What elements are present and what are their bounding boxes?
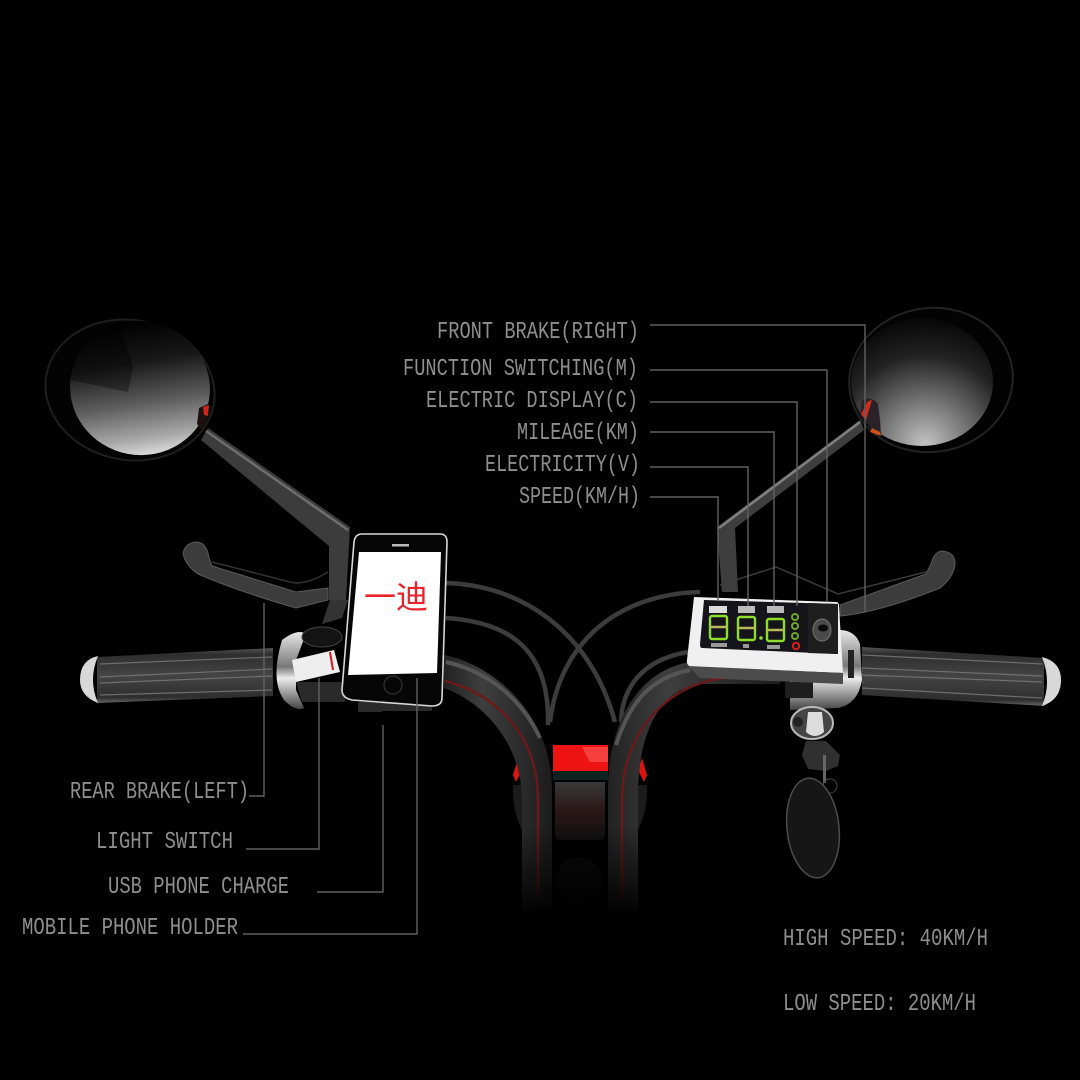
phone screen <box>348 552 441 675</box>
label: electric display: ELECTRIC DISPLAY(C) <box>426 388 638 415</box>
cables <box>446 583 700 725</box>
left brake lever <box>183 542 328 608</box>
label: light switch: LIGHT SWITCH <box>96 829 233 856</box>
label: high speed: HIGH SPEED: 40KM/H <box>783 926 988 953</box>
phone clamp <box>322 600 348 624</box>
central frame and handlebar stems <box>444 583 780 917</box>
key head <box>802 741 840 771</box>
right mirror <box>717 297 1022 592</box>
display unit <box>687 597 843 684</box>
phone mount bottom <box>358 702 432 712</box>
label: mobile phone holder: MOBILE PHONE HOLDER <box>22 915 238 942</box>
mirror glass <box>70 321 210 456</box>
mirror arm <box>201 428 350 600</box>
right brake lever <box>720 551 955 616</box>
label: usb phone charge: USB PHONE CHARGE <box>108 874 289 901</box>
label: speed: SPEED(KM/H) <box>519 484 640 511</box>
right chrome collar <box>785 630 862 710</box>
mirror rim <box>840 297 1022 463</box>
switch panel <box>808 603 838 654</box>
lower fade <box>490 825 670 917</box>
mirror red accent <box>860 399 881 435</box>
left mirror <box>34 306 350 600</box>
label: low speed: LOW SPEED: 20KM/H <box>783 991 976 1018</box>
phone speaker <box>392 544 409 546</box>
handlebar infographic <box>23 306 1061 1010</box>
status LEDs <box>792 614 799 649</box>
green voltage digit <box>738 617 755 640</box>
label: function switching: FUNCTION SWITCHING(M) <box>403 356 638 383</box>
left chrome collar and switch <box>276 632 306 709</box>
label: electricity: ELECTRICITY(V) <box>485 452 640 479</box>
phone logo: 一迪 <box>364 579 428 615</box>
side fairings <box>513 785 522 830</box>
lower round part <box>556 857 602 903</box>
phone body <box>342 534 447 706</box>
function switch <box>813 619 831 641</box>
mirror rim <box>34 306 226 474</box>
green mileage digit <box>767 619 784 641</box>
left grip <box>80 600 348 709</box>
lock <box>791 707 833 739</box>
top unit labels <box>709 606 727 613</box>
label: front brake: FRONT BRAKE(RIGHT) <box>437 319 639 346</box>
callout lines left <box>243 603 417 934</box>
right stem <box>608 662 780 915</box>
green speed digit <box>710 616 727 639</box>
mirror red accent <box>197 404 209 430</box>
label: rear brake: REAR BRAKE(LEFT) <box>70 779 249 806</box>
centre console <box>555 782 605 840</box>
fob <box>782 776 844 880</box>
right grip <box>862 647 1061 706</box>
callout lines right <box>650 325 865 612</box>
dark panel <box>700 600 838 654</box>
mirror arm <box>717 420 864 592</box>
phone <box>342 534 447 706</box>
mirror glass <box>851 318 993 446</box>
label: mileage: MILEAGE(KM) <box>517 420 639 447</box>
red headlight band <box>513 745 647 782</box>
chrome casing <box>687 597 843 673</box>
ignition key and fob <box>782 707 844 880</box>
home button <box>384 676 402 694</box>
bottom unit labels <box>711 643 780 649</box>
left stem <box>444 655 552 915</box>
